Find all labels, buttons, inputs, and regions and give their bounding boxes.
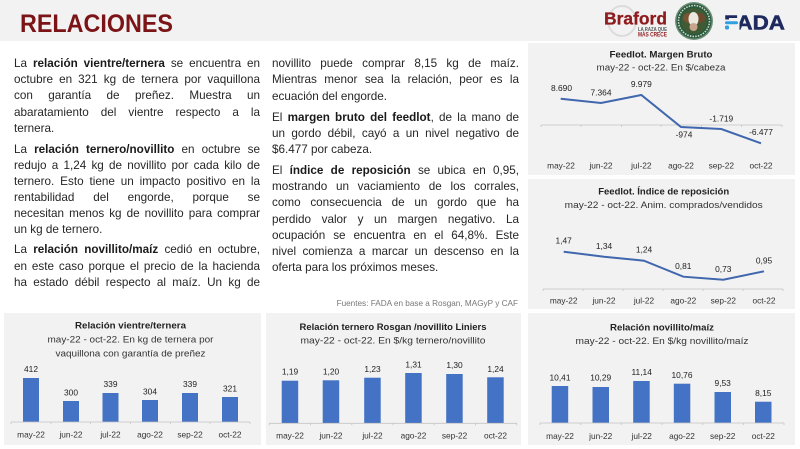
panel: relacion vientre/ternera — [4, 313, 261, 445]
bar chart: ago-22 — [669, 431, 695, 441]
bar chart: 1,31 — [405, 359, 422, 369]
line chart: ago-22 — [668, 161, 694, 171]
text block: middle column: oferta para los próximos meses. — [272, 261, 438, 274]
subtitle line 2: vaquillona con garantía de preñez — [56, 348, 206, 360]
bar chart: jul-22 — [99, 429, 121, 439]
line chart: 0,95 — [756, 255, 772, 265]
bar chart: jul-22 — [631, 431, 652, 441]
line chart: oct-22 — [749, 161, 773, 171]
panel: relacion novillito/maiz — [528, 313, 795, 445]
heading: Feedlot. Índice de reposición — [598, 186, 729, 198]
line chart — [541, 79, 782, 171]
bar chart: 10,41 — [550, 373, 571, 383]
subtitle: may-22 - oct-22. En kg de ternera por — [48, 334, 214, 346]
line chart: may-22 — [550, 295, 578, 305]
text block: middle column: perdido valor y un margen negativo. La — [272, 213, 519, 226]
subtitle: may-22 - oct-22. Anim. comprados/vendidos — [565, 200, 763, 211]
text block: middle column: como consecuencia de un gordo que ha — [272, 196, 519, 209]
bar chart: jun-22 — [58, 429, 83, 439]
bar chart: 1,20 — [323, 367, 339, 377]
text block: middle column: un gordo débil, cayó a un nivel negativo de — [272, 127, 519, 140]
logo: Braford: LA RAZA QUE — [638, 27, 667, 33]
bar chart: sep-22 — [177, 429, 203, 439]
line chart: jun-22 — [591, 295, 616, 305]
line chart: 1,24 — [636, 245, 652, 255]
text block: left column: rentabilidad del engorde, porque se — [14, 191, 260, 204]
heading: Feedlot. Margen Bruto — [610, 50, 713, 60]
line chart — [543, 236, 783, 305]
bar chart: jul-22 — [361, 430, 383, 440]
text block: middle column: mostrando un vaciamiento de los corrales, — [272, 180, 519, 193]
text block: left column: La relación ternero/novillito en octubre se — [14, 143, 260, 156]
line chart: jul-22 — [630, 161, 652, 171]
text block: middle column: nivel comienza a marcar un descenso en la — [272, 245, 519, 258]
subtitle: may-22 - oct-22. En $/cabeza — [596, 62, 726, 74]
bar chart: sep-22 — [442, 430, 468, 440]
bar chart: 304 — [143, 386, 157, 396]
text block: middle column: El índice de reposición se ubica en 0,95, — [272, 164, 519, 177]
bar chart: 412 — [24, 364, 38, 374]
line chart: 0,73 — [715, 264, 732, 274]
line chart: jul-22 — [633, 295, 655, 305]
line chart: 1,34 — [596, 241, 612, 251]
bar chart: jun-22 — [588, 431, 613, 441]
bar chart — [269, 359, 517, 440]
bar chart: ago-22 — [401, 430, 427, 440]
bar chart: 339 — [104, 379, 118, 389]
line chart: ago-22 — [670, 295, 697, 305]
line chart: 7.364 — [591, 87, 612, 97]
title: RELACIONES — [20, 10, 173, 38]
logo: Braford: MÁS CRECE — [638, 32, 667, 38]
bar chart: jun-22 — [318, 430, 343, 440]
text block: left column: con garantía de preñez. Muestra un — [14, 89, 260, 102]
text block: left column: octubre en 321 kg de ternera por vaquillona — [14, 73, 260, 86]
panel: Feedlot indice de reposicion — [528, 179, 795, 309]
heading: Relación novillito/maíz — [610, 322, 714, 334]
text block: middle column: Mientras menor sea la relación, peor es la — [272, 73, 519, 86]
bar chart — [11, 364, 250, 439]
panel: relacion ternero/novillito — [266, 313, 521, 445]
text block: left column: un kg de ternero. — [14, 223, 102, 236]
text block: left column: necesitan menos kg de novillito para comprar — [14, 207, 260, 220]
text block: middle column: novillito puede comprar 8,15 kg de maíz. — [272, 57, 519, 70]
line chart: 8.690 — [551, 83, 572, 93]
heading: Relación vientre/ternera — [75, 320, 187, 332]
bar chart: 321 — [223, 383, 237, 393]
line chart: jun-22 — [588, 161, 613, 171]
logo: seal with bull head — [675, 2, 713, 40]
text block: left column — [14, 57, 260, 289]
bar chart: 10,76 — [672, 370, 693, 380]
line chart: may-22 — [547, 161, 575, 171]
line chart: oct-22 — [752, 295, 776, 305]
subtitle: may-22 - oct-22. En $/kg ternero/novillito — [300, 336, 486, 346]
line chart: sep-22 — [709, 161, 734, 171]
text block: left column: redujo a 1,24 kg de novillito por cada kilo de — [14, 159, 260, 172]
logo: FADA: FADA — [724, 12, 785, 34]
text block: middle column: El margen bruto del feedlot, de la mano de — [272, 111, 519, 124]
bar chart: 1,24 — [487, 364, 504, 374]
text block: left column: ternero. Esto tiene un impacto positivo en la — [14, 175, 260, 188]
text block: middle column: ocupación se encuentra en el 64,8%. Este — [272, 229, 519, 242]
bar chart: 300 — [64, 387, 78, 397]
bar chart: may-22 — [546, 431, 574, 441]
panel: Feedlot margen bruto — [528, 43, 795, 175]
subtitle: may-22 - oct-22. En $/kg novillito/maíz — [576, 336, 749, 347]
text block: left column: ternera. — [14, 122, 54, 135]
line chart: 9.979 — [631, 79, 652, 89]
line chart: 1,47 — [556, 236, 572, 246]
bar chart: ago-22 — [137, 429, 163, 439]
logo: Braford: Braford — [604, 8, 667, 28]
text block: left column: La relación novillito/maíz cedió en octubre, — [14, 243, 260, 256]
bar chart: oct-22 — [752, 431, 775, 441]
text block: left column: abaratamiento del vientre respecto a la — [14, 106, 260, 119]
bar chart: 339 — [183, 379, 197, 389]
bar chart: may-22 — [276, 430, 304, 440]
line chart: 0,81 — [675, 261, 692, 271]
text block: left column: en este caso porque el precio de la hacienda — [14, 260, 260, 273]
bar chart: 1,19 — [282, 367, 298, 377]
bar chart: 11,14 — [632, 367, 652, 377]
sources note: Fuentes: FADA en base a Rosgan, MAGyP y CAF — [337, 299, 518, 308]
line chart: -6.477 — [749, 127, 773, 137]
bar chart: sep-22 — [710, 431, 736, 441]
text block: middle column — [272, 57, 519, 274]
bar chart: 10,29 — [590, 373, 612, 383]
bar chart: 9,53 — [715, 378, 731, 388]
bar chart: may-22 — [17, 429, 45, 439]
bar chart — [540, 367, 784, 441]
bar chart: 8,15 — [755, 388, 772, 398]
line chart: sep-22 — [711, 295, 736, 305]
line chart: -974 — [676, 130, 693, 140]
bar chart: oct-22 — [218, 429, 242, 439]
heading: Relación ternero Rosgan /novillito Liniers — [300, 322, 486, 333]
text block: middle column: ecuación del engorde. — [272, 90, 387, 103]
header band — [0, 0, 800, 41]
logo: Braford — [604, 6, 667, 38]
bar chart: 1,23 — [364, 364, 381, 374]
text block: middle column: $6.477 por cabeza. — [272, 143, 372, 156]
bar chart: oct-22 — [484, 430, 507, 440]
text block: left column: La relación vientre/ternera se encuentra en — [14, 57, 260, 70]
text block: left column: ha estado débil respecto al maíz. Un kg de — [14, 276, 260, 289]
line chart: -1.719 — [709, 113, 734, 123]
bar chart: 1,30 — [446, 360, 463, 370]
